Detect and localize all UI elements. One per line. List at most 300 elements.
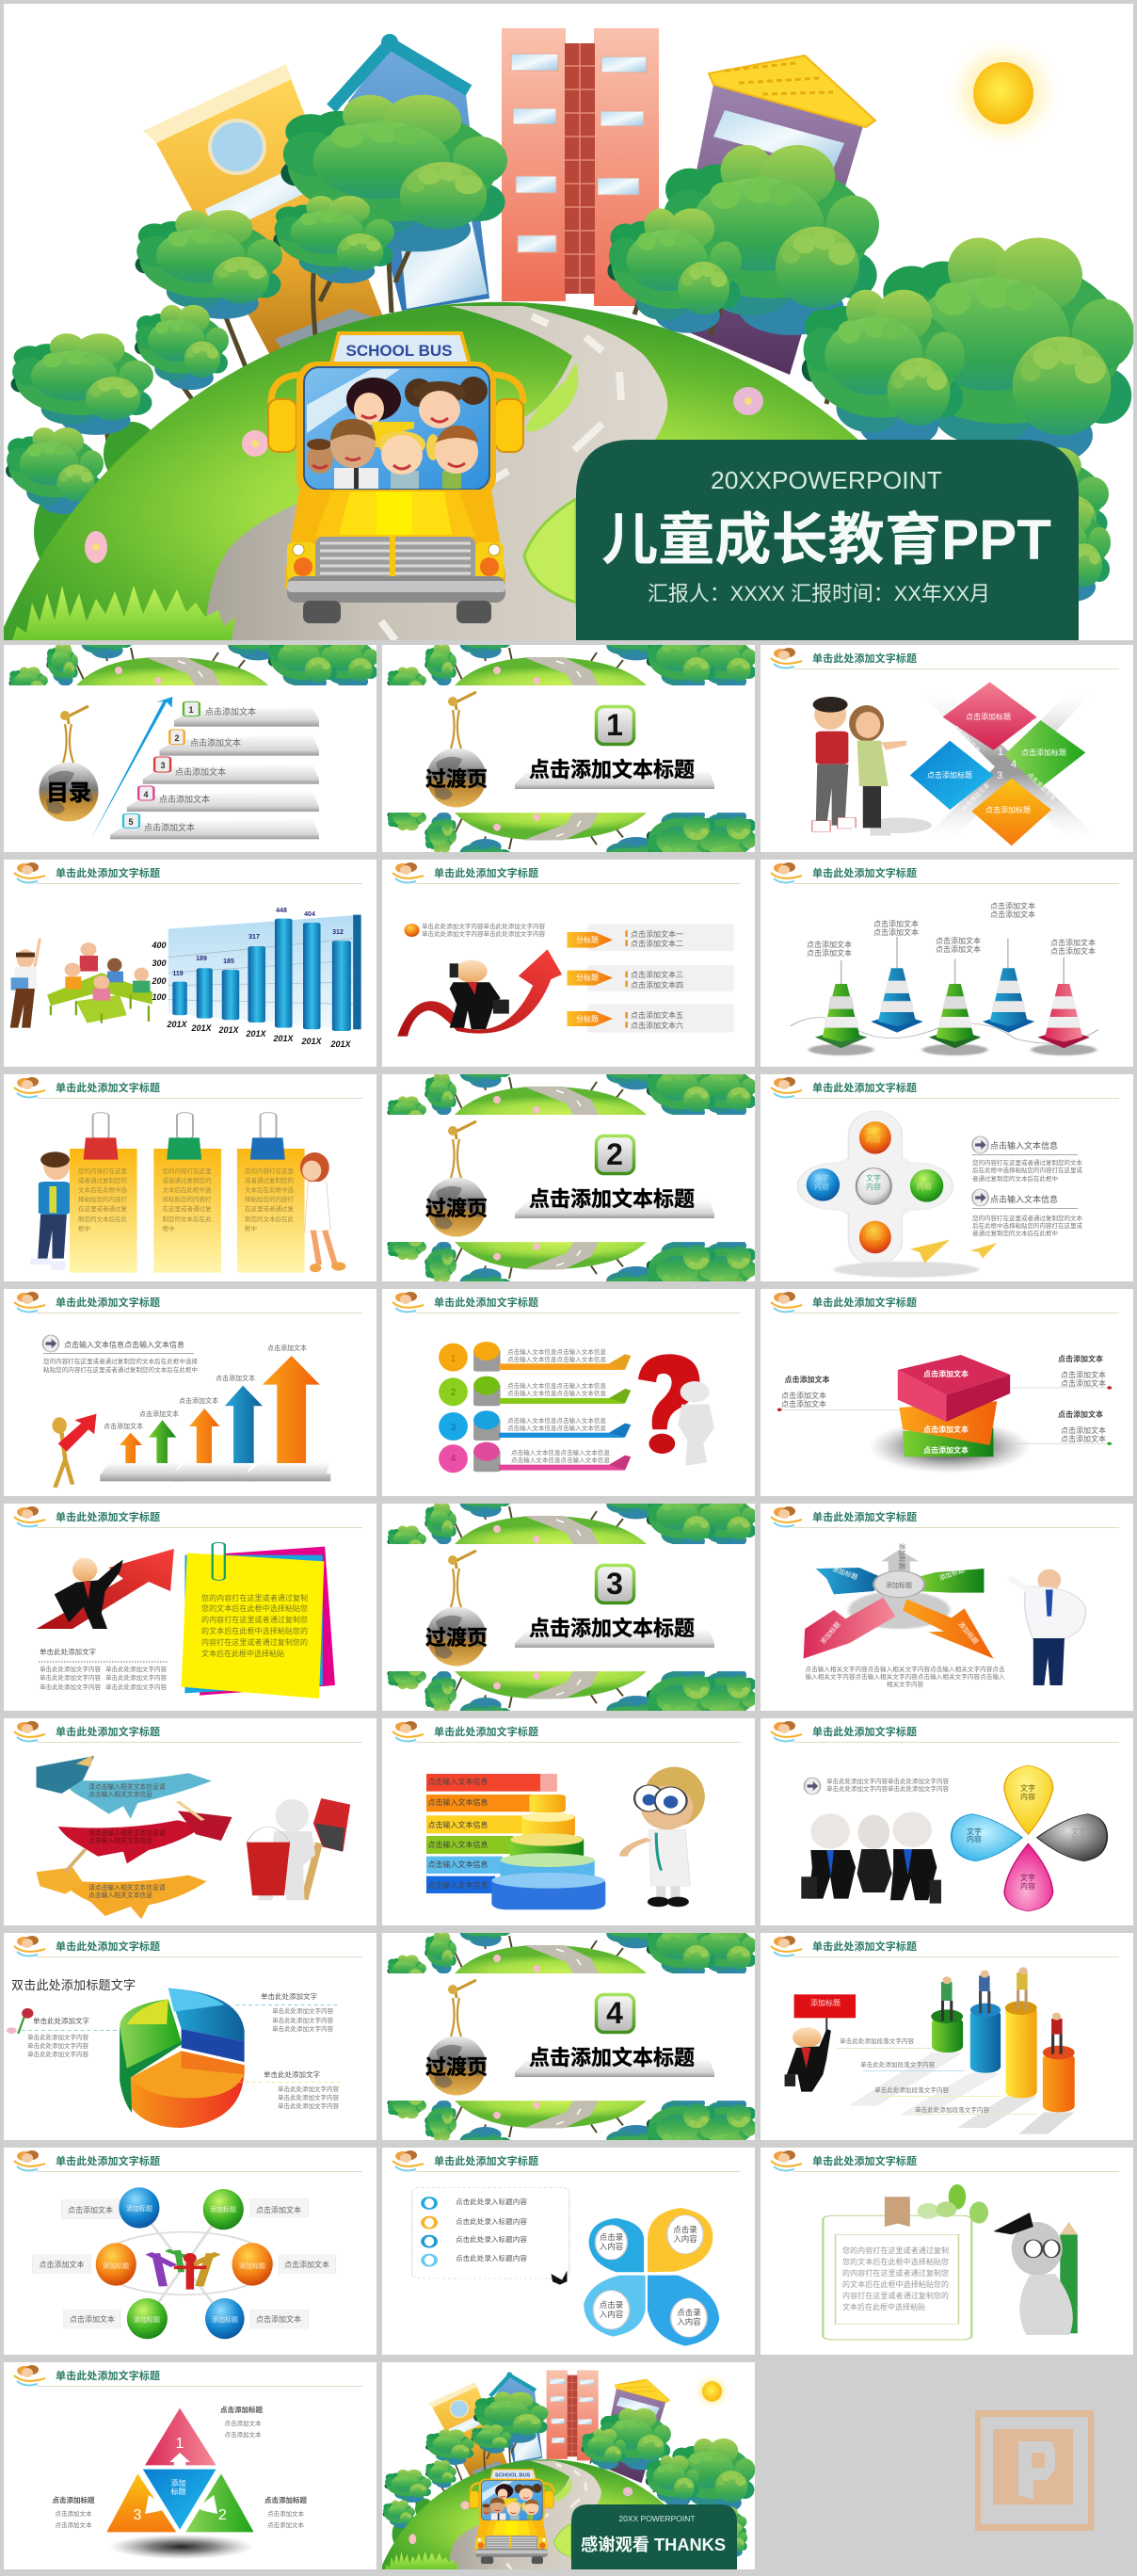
header: 单击此处添加文字标题 <box>56 2369 160 2382</box>
pie text right top: 单击此处添加文字内容 <box>272 2006 333 2015</box>
header <box>771 1506 1119 1528</box>
cube and side labels: 点击添加文本 <box>781 1399 826 1409</box>
paint item text: 1 <box>451 1354 456 1364</box>
petal text <box>600 2225 701 2326</box>
paint item text: 点击输入文本信息点击输入文本信息 <box>507 1424 606 1432</box>
text block 1: 者通过复制您的文本后在此框中 <box>972 1174 1058 1183</box>
diamond labels <box>927 712 1066 814</box>
header <box>771 1292 1119 1313</box>
pyramid labels: 点击输入文本信息 <box>427 1777 488 1786</box>
text block 1: 点击输入文本信息 <box>990 1140 1058 1151</box>
cone labels <box>807 901 1096 958</box>
illustration: red arrow and businessman <box>397 949 562 1037</box>
chart labels: 100 <box>152 992 167 1002</box>
section label: 过渡页 <box>425 1197 488 1220</box>
diamond labels: 点击添加文本 <box>951 722 983 755</box>
contents list: 点击添加文本 <box>175 766 226 777</box>
diamond labels: 2 <box>985 759 990 770</box>
diamond labels: 4 <box>1011 759 1017 770</box>
description text: 相关文字内容 <box>887 1680 924 1688</box>
illustration: figures on cylinders <box>941 1967 1063 2054</box>
orb and box labels: 点击添加文本 <box>256 2314 301 2324</box>
diamond labels: 点击添加标题 <box>1021 748 1066 757</box>
orb and box labels: 点击添加文本 <box>40 2260 85 2269</box>
chart labels: 312 <box>332 929 344 936</box>
pyramid labels: 点击输入文本信息 <box>427 1820 488 1829</box>
intro text: 单击此处添加文字内容单击此处添加文字内容 <box>826 1777 949 1785</box>
header <box>771 2150 1119 2172</box>
header <box>771 862 1119 884</box>
petal text: 点击录 <box>600 2300 624 2310</box>
chart labels: 201X <box>190 1023 213 1033</box>
card text: 文本后在此框中选 <box>245 1185 294 1194</box>
text block: 单击此处添加文字 <box>40 1647 96 1656</box>
header: 单击此处添加文字标题 <box>56 2154 160 2167</box>
pie text right top: 单击此处添加文字内容 <box>272 2024 333 2033</box>
cube and side labels: 点击添加文本 <box>785 1375 830 1384</box>
list text: 点击添加文本一 <box>631 929 683 939</box>
card text: 择粘贴您的内容打 <box>245 1195 294 1203</box>
panel: paint cans list with question mark <box>382 1289 755 1496</box>
card text: 框中 <box>245 1224 257 1232</box>
card text: 您的内容打在这里 <box>245 1167 294 1175</box>
cube and side labels: 点击添加文本 <box>1058 1354 1103 1363</box>
header <box>14 1936 362 1957</box>
chart labels: 317 <box>248 934 260 941</box>
sticky note text: 内容打在这里或者通过复制您的 <box>201 1637 308 1647</box>
header: 单击此处添加文字标题 <box>812 1940 917 1953</box>
pie text right bottom <box>264 2069 339 2110</box>
heading: contents: 目录 <box>46 781 91 806</box>
intro block: 您的内容打在这里或者通过复制您的文本后在此框中选择 <box>43 1357 198 1365</box>
right label: 点击添加文本 <box>267 2520 305 2529</box>
paint item text: 4 <box>451 1454 456 1464</box>
triangle text <box>134 2436 227 2523</box>
panel: thanks closing slide <box>382 2362 755 2569</box>
divider artwork <box>387 604 757 893</box>
text block 2: 点击输入文本信息 <box>990 1194 1058 1204</box>
cube and side labels: 点击添加文本 <box>923 1425 969 1434</box>
cone labels: 点击添加文本 <box>936 944 981 954</box>
text block: 单击此处添加文字内容 <box>105 1682 168 1691</box>
petal text: 内容 <box>1020 1881 1035 1891</box>
arrow labels: 添加标题 <box>956 1620 980 1646</box>
stroke text: 点击输入相关文本信息 <box>88 1891 152 1899</box>
top label <box>220 2405 263 2439</box>
divider artwork <box>387 1892 757 2181</box>
cone labels: 点击添加文本 <box>1050 946 1096 956</box>
petal text <box>967 1783 1086 1891</box>
watermark stamp logo <box>975 2410 1094 2531</box>
sticky note text: 的文本后在此框中选择粘贴您的 <box>201 1626 308 1635</box>
diagonal blue arrow and shelves <box>90 697 319 840</box>
chart title: 双击此处添加标题文字 <box>11 1978 136 1992</box>
chart labels <box>151 908 352 1049</box>
list text: 分标题 <box>576 973 599 982</box>
dashed list box <box>412 2187 569 2278</box>
sticky note stack <box>182 1542 335 1699</box>
paint item text: 点击输入文本信息点击输入文本信息 <box>507 1347 606 1356</box>
contents list: 4 <box>143 790 149 799</box>
panel: list and butterfly petals <box>382 2148 755 2355</box>
header: 单击此处添加文字标题 <box>812 866 917 879</box>
icon: butterfly <box>552 2271 567 2285</box>
chart: radial arrows <box>804 1550 993 1659</box>
note text: 的文本后在此框中选择粘贴您的 <box>842 2279 949 2289</box>
diamond labels: 点击添加标题 <box>966 712 1011 721</box>
arrow labels: 点击添加文本 <box>179 1396 218 1405</box>
header <box>771 1077 1119 1099</box>
petal text: 入内容 <box>600 2242 624 2251</box>
description text <box>806 1665 1005 1688</box>
list text: 点击此处录入标题内容 <box>456 2234 527 2244</box>
pyramid labels: 点击输入文本信息 <box>427 1860 488 1869</box>
pie text left: 单击此处添加文字内容 <box>27 2041 88 2050</box>
diamond labels: 点击添加文本 <box>959 781 992 813</box>
header: 单击此处添加文字标题 <box>434 1725 538 1738</box>
list text: 点击此处录入标题内容 <box>456 2197 527 2206</box>
pie text right top: 单击此处添加文字 <box>261 1991 317 2001</box>
text block: 单击此处添加文字内容 <box>105 1665 168 1673</box>
sticky note text: 文本后在此框中选择粘贴 <box>201 1649 284 1658</box>
chart: cube stack <box>777 1355 1112 1473</box>
arrow labels: 点击添加文本 <box>104 1422 143 1430</box>
top label: 点击添加标题 <box>220 2405 263 2414</box>
text block 2: 者通过复制您的文本后在此框中 <box>972 1229 1058 1237</box>
contents list: 1 <box>188 705 194 715</box>
cylinder labels: 单击此处添加段落文字内容 <box>840 2037 915 2045</box>
header: 单击此处添加文字标题 <box>434 2154 538 2167</box>
contents list: 点击添加文本 <box>159 794 210 804</box>
chart labels: 185 <box>223 958 234 965</box>
chart: stacked pyramid <box>426 1774 605 1909</box>
panel: color pyramid with doctor <box>382 1718 755 1925</box>
panel: arrow man with sticky notes <box>4 1504 376 1711</box>
pie text right bottom: 单击此处添加文字内容 <box>278 2101 339 2110</box>
diamond labels: 3 <box>997 770 1002 781</box>
chart: pie <box>22 1988 341 2128</box>
arrow labels: 添加标题 <box>819 1620 842 1646</box>
panel: section divider 2 <box>382 1033 757 1322</box>
stroke text <box>88 1782 166 1899</box>
orb and box labels: 添加标题 <box>210 2205 236 2214</box>
divider artwork <box>387 1033 757 1322</box>
cone labels: 点击添加文本 <box>807 948 852 958</box>
panel: 3D pie chart <box>4 1933 376 2140</box>
chart labels: 300 <box>152 958 167 968</box>
pyramid labels: 点击输入文本信息 <box>427 1840 488 1849</box>
list cards <box>567 925 734 1033</box>
chart labels: 400 <box>151 941 167 950</box>
petal text: 入内容 <box>600 2310 624 2319</box>
header <box>14 1292 362 1313</box>
card text: 制您的文本后在此 <box>162 1215 212 1223</box>
panel: six orbs network <box>4 2148 376 2355</box>
top label: 点击添加文本 <box>224 2419 262 2427</box>
cube and side labels <box>781 1354 1106 1455</box>
orb and box labels: 点击添加文本 <box>256 2205 301 2214</box>
panel: section divider 4 <box>382 1892 757 2181</box>
section number: 4 <box>606 1996 623 2030</box>
paint item text: 点击输入文本信息点击输入文本信息 <box>511 1456 610 1464</box>
text block 2 <box>972 1189 1082 1237</box>
text block 1 <box>972 1136 1082 1183</box>
diamond labels: 点击添加文本 <box>1006 716 1039 749</box>
arrow labels: 添加标题 <box>937 1566 966 1583</box>
cube and side labels: 点击添加文本 <box>1061 1378 1106 1388</box>
text block 2: 您的内容打在这里或者通过复制您的文本 <box>972 1214 1082 1222</box>
petal text: 文字 <box>1020 1873 1035 1882</box>
title banner <box>576 440 1079 640</box>
description text: 点击输入相关文字内容点击输入相关文字内容点击输入相关文字内容点击 <box>806 1665 1005 1673</box>
orb and box labels: 点击添加文本 <box>284 2260 329 2269</box>
title banner: 汇报人：XXXX 汇报时间：XX年XX月 <box>648 582 990 605</box>
list text: 分标题 <box>576 935 599 944</box>
panel: clover of orbs with two text blocks <box>761 1074 1133 1281</box>
panel: contents slide <box>4 604 378 852</box>
list text <box>576 929 683 1030</box>
arrow labels: 点击添加文本 <box>139 1409 179 1418</box>
panel: paint brush strokes with figure <box>4 1718 376 1925</box>
list text: 点击添加文本六 <box>631 1021 683 1030</box>
chart labels: 201X <box>272 1034 295 1043</box>
text block 1: 您的内容打在这里或者通过复制您的文本 <box>972 1158 1082 1167</box>
panel: businessman on red arrow with three lists <box>382 860 755 1067</box>
note frame with clip and leaves <box>823 2184 988 2340</box>
card text: 框中 <box>78 1224 90 1232</box>
section number: 2 <box>606 1137 623 1171</box>
header: 单击此处添加文字标题 <box>434 1296 538 1309</box>
triangle text: 标题 <box>171 2487 186 2496</box>
cone labels: 点击添加文本 <box>873 919 919 928</box>
orb and box labels: 添加标题 <box>103 2262 129 2270</box>
header: 单击此处添加文字标题 <box>56 1081 160 1094</box>
petal text: 点击录 <box>677 2308 701 2317</box>
illustration: girl <box>300 1152 345 1272</box>
list text: 点击添加文本三 <box>631 970 683 979</box>
list text: 分标题 <box>576 1014 599 1023</box>
arrow labels: 添加标题 <box>886 1581 912 1589</box>
panel: stacked cube diagram <box>761 1289 1133 1496</box>
petal text: 内容 <box>967 1834 982 1843</box>
header: 单击此处添加文字标题 <box>812 1296 917 1309</box>
paint item text: 点击输入文本信息点击输入文本信息 <box>507 1381 606 1390</box>
header <box>14 2150 362 2172</box>
diamond labels: 点击添加标题 <box>985 805 1031 814</box>
chart labels: 200 <box>151 976 167 986</box>
panel: rising arrows <box>4 1289 376 1496</box>
diamond labels: 点击添加文本 <box>1026 770 1058 803</box>
petal text: 入内容 <box>673 2234 697 2244</box>
pie text right bottom: 单击此处添加文字内容 <box>278 2085 339 2093</box>
cube and side labels: 点击添加文本 <box>923 1445 969 1455</box>
illustration: presenter man <box>1009 1570 1085 1685</box>
list text: 点击添加文本五 <box>631 1010 683 1020</box>
cylinder labels: 单击此处添加段落文字内容 <box>915 2105 990 2114</box>
petal text: 文字 <box>1071 1827 1086 1836</box>
icon: rose <box>7 2008 33 2034</box>
panel: business team with petals <box>761 1718 1133 1925</box>
sticky note text: 您的文本后在此框中选择粘贴您 <box>201 1603 308 1613</box>
pie text right top <box>261 1991 333 2033</box>
list text: 点击添加文本四 <box>631 980 683 990</box>
panel: section divider 1 <box>382 604 757 893</box>
header <box>14 1077 362 1099</box>
header <box>771 648 1119 669</box>
illustration: students and diamonds <box>812 682 1095 845</box>
illustration: school bus on hill with buildings and trees <box>4 28 1134 640</box>
panel: cylinders with people <box>761 1933 1133 2140</box>
illustration: mini school bus scene <box>382 2370 755 2569</box>
list text: 点击添加文本二 <box>631 939 683 948</box>
petal text: 内容 <box>1020 1792 1035 1801</box>
intro text: 单击此处添加文字内容单击此处添加文字内容 <box>826 1784 949 1793</box>
thanks banner: 感谢观看 THANKS <box>581 2536 726 2554</box>
illustration: boy <box>30 1151 70 1270</box>
panel: hero cover slide <box>4 4 1134 640</box>
paint item text: 点击输入文本信息点击输入文本信息 <box>507 1416 606 1425</box>
sticky note text <box>201 1593 308 1658</box>
illustration: teacher and pupils at desks <box>10 939 152 1028</box>
divider artwork <box>387 1462 757 1751</box>
header <box>14 2365 362 2387</box>
orb and box labels: 点击添加文本 <box>70 2314 115 2324</box>
pyramid labels: 点击输入文本信息 <box>427 1797 488 1807</box>
card text: 您的内容打在这里 <box>78 1167 128 1175</box>
note text: 内容打在这里或者通过复制您的 <box>842 2291 949 2300</box>
bar chart <box>168 915 361 1031</box>
triangle text: 3 <box>134 2507 142 2523</box>
note text: 您的内容打在这里或者通过复制 <box>842 2246 949 2255</box>
illustration: colorful cheering people <box>149 2250 217 2290</box>
chart: cones <box>791 937 1098 1055</box>
cube and side labels: 点击添加文本 <box>781 1391 826 1400</box>
orb and box labels: 点击添加文本 <box>68 2205 113 2214</box>
chart: four petals <box>952 1765 1107 1911</box>
intro block <box>43 1335 198 1374</box>
diagram: orbs <box>797 1111 997 1278</box>
orb and box labels: 添加标题 <box>134 2315 160 2324</box>
petal text: 内容 <box>1071 1834 1086 1843</box>
chart labels: 448 <box>276 908 287 914</box>
title banner: 儿童成长教育PPT <box>601 508 1051 572</box>
intro block: 点击输入文本信息点击输入文本信息 <box>64 1340 184 1349</box>
cone labels: 点击添加文本 <box>990 910 1035 919</box>
orb and box labels: 添加标题 <box>212 2315 238 2324</box>
orb and box labels: 添加标题 <box>126 2204 152 2213</box>
orb text: 文字 <box>866 1126 881 1135</box>
cards and clips <box>70 1113 305 1273</box>
icon: wrecking ball <box>40 706 98 821</box>
stroke text: 点击输入相关文本信息 <box>88 1836 152 1844</box>
intro text: 单击此处添加文字内容单击此处添加文字内容 <box>422 929 546 938</box>
cone labels: 点击添加文本 <box>1050 938 1096 947</box>
illustration: gold figure with red arrow <box>52 1414 96 1488</box>
panel: five traffic cones <box>761 860 1133 1067</box>
orb text: 内容 <box>814 1182 829 1191</box>
cube and side labels: 点击添加文本 <box>1058 1409 1103 1419</box>
header: 单击此处添加文字标题 <box>56 1510 160 1523</box>
pie text right bottom: 单击此处添加文字 <box>264 2069 320 2079</box>
diamond labels: 1 <box>998 747 1003 758</box>
orb text: 内容 <box>866 1232 881 1241</box>
illustration: man holding sign <box>785 1994 856 2092</box>
chart labels: 189 <box>196 956 207 962</box>
paint items <box>439 1342 631 1473</box>
pie text right bottom: 单击此处添加文字内容 <box>278 2093 339 2101</box>
header: 单击此处添加文字标题 <box>812 1510 917 1523</box>
text block: 单击此处添加文字内容 <box>40 1665 102 1673</box>
section label: 过渡页 <box>425 1626 488 1650</box>
card text: 或者通过复制您的 <box>245 1176 294 1184</box>
card text <box>78 1167 294 1232</box>
panel: three binder-clip notes <box>4 1074 376 1281</box>
card text: 您的内容打在这里 <box>162 1167 212 1175</box>
section number: 1 <box>606 708 623 742</box>
panel: triangle diagram <box>4 2362 376 2569</box>
arrow labels <box>104 1344 307 1430</box>
cone labels: 点击添加文本 <box>873 927 919 937</box>
section title: 点击添加文本标题 <box>529 758 695 781</box>
chart: cylinders <box>848 2001 1075 2134</box>
left label <box>53 2495 95 2529</box>
cylinder labels <box>838 2037 1037 2115</box>
cone labels: 点击添加文本 <box>807 940 852 949</box>
orb text: 内容 <box>917 1182 932 1191</box>
illustration: businessman and red arrow <box>37 1549 174 1629</box>
left label: 点击添加标题 <box>53 2495 95 2504</box>
illustration: doctor <box>624 1767 705 1907</box>
text block 1: 后在此框中选择粘贴您的内容打在这里或 <box>972 1166 1082 1174</box>
card text: 制您的文本后在此 <box>245 1215 294 1223</box>
card text: 在这里或者通过复 <box>162 1204 212 1213</box>
diagram: orbs and rings <box>33 2187 336 2339</box>
right label <box>264 2495 307 2529</box>
illustration: figure with bucket and big brush <box>247 1798 350 1900</box>
contents list: 3 <box>160 761 166 770</box>
cylinder labels: 单击此处添加段落文字内容 <box>860 2060 936 2069</box>
intro text <box>805 1777 949 1795</box>
card text: 或者通过复制您的 <box>162 1176 212 1184</box>
contents list <box>128 705 256 832</box>
illustration: three businessmen <box>801 1812 941 1904</box>
card text: 框中 <box>162 1224 175 1232</box>
card text: 制您的文本后在此 <box>78 1215 128 1223</box>
text block <box>39 1647 168 1691</box>
header: 单击此处添加文字标题 <box>56 866 160 879</box>
list text: 点击此处录入标题内容 <box>456 2216 527 2226</box>
arrow labels <box>819 1543 980 1646</box>
card text: 或者通过复制您的 <box>78 1176 128 1184</box>
right label: 点击添加标题 <box>264 2495 307 2504</box>
pyramid labels: 点击输入文本信息 <box>427 1880 488 1890</box>
text block: 单击此处添加文字内容 <box>40 1682 102 1691</box>
orb text: 文字 <box>814 1173 829 1183</box>
header <box>14 862 362 884</box>
note text: 您的文本后在此框中选择粘贴您 <box>842 2257 949 2266</box>
section number: 3 <box>606 1567 623 1601</box>
pie text left: 单击此处添加文字内容 <box>27 2033 88 2041</box>
panel: 3D bar chart with classroom <box>4 860 376 1067</box>
header <box>771 1721 1119 1743</box>
contents list: 2 <box>174 733 180 743</box>
card text: 文本后在此框中选 <box>78 1185 128 1194</box>
chart: triangles <box>106 2408 254 2559</box>
section title: 点击添加文本标题 <box>529 1617 695 1640</box>
header: 单击此处添加文字标题 <box>812 1081 917 1094</box>
header <box>14 1721 362 1743</box>
orb text: 文字 <box>866 1173 881 1183</box>
